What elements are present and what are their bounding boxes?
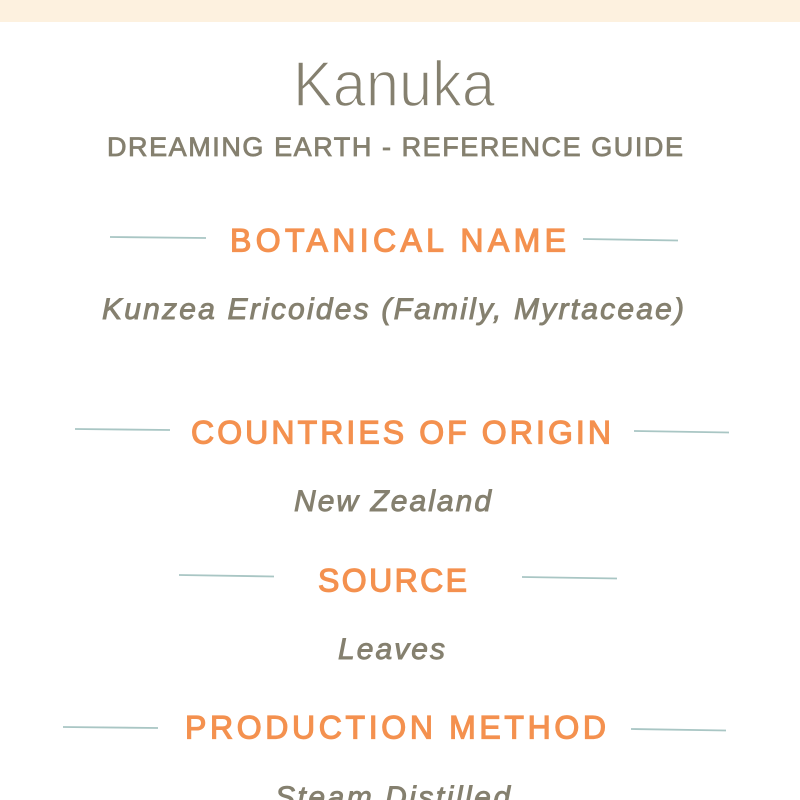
heading: production method: PRODUCTION METHOD: [185, 710, 606, 746]
subtitle: DREAMING EARTH - REFERENCE GUIDE: [107, 132, 683, 162]
title: Kanuka: [293, 48, 495, 120]
heading: source: SOURCE: [318, 562, 467, 598]
value: source: Leaves: [338, 633, 445, 666]
section: production method: [63, 710, 726, 800]
section: botanical name: [102, 222, 684, 326]
section: source: [179, 562, 617, 666]
top cream band: [0, 0, 800, 22]
value: botanical name: Kunzea Ericoides (Family, Myrtaceae): [102, 293, 684, 326]
heading: botanical name: BOTANICAL NAME: [230, 222, 566, 258]
section: countries of origin: [75, 414, 729, 518]
heading: countries of origin: COUNTRIES OF ORIGIN: [191, 414, 611, 450]
value: countries of origin: New Zealand: [294, 485, 492, 518]
